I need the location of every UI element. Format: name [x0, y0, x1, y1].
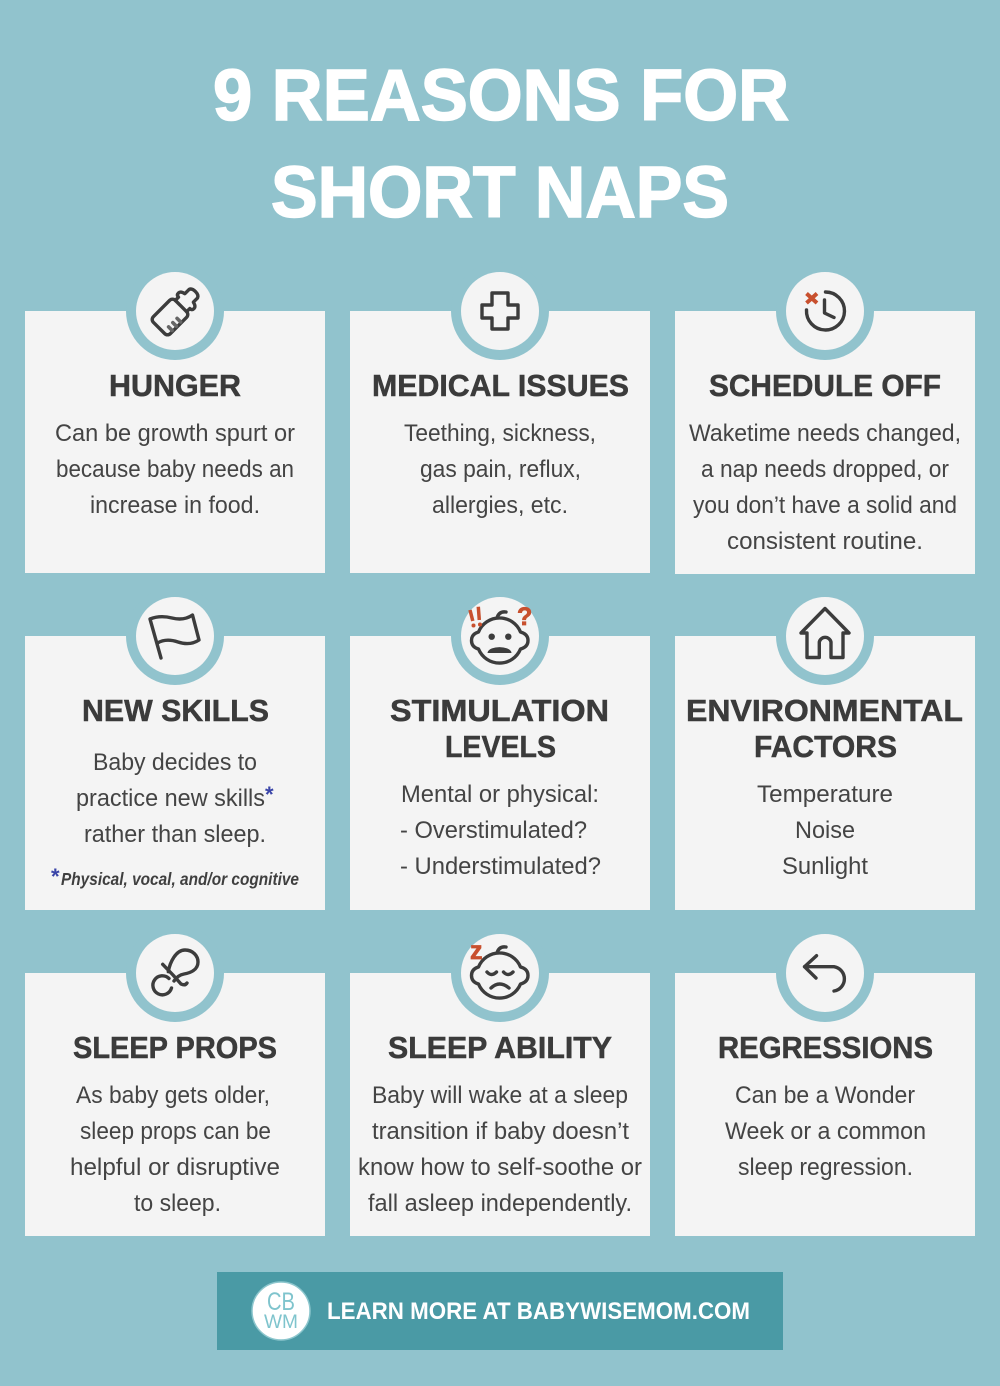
icon: pacifier: [153, 950, 198, 995]
body text: to sleep.: [134, 1190, 221, 1217]
body text: sleep props can be: [80, 1118, 271, 1145]
logo: WM: [264, 1312, 298, 1333]
body text: Baby decides to: [93, 749, 257, 776]
body text: - Overstimulated?: [400, 817, 587, 844]
banner: [217, 1272, 783, 1350]
panel: hunger: [25, 262, 325, 573]
panel: schedule off: [675, 262, 975, 574]
icon: worried baby face: ?: [517, 603, 532, 631]
body text: transition if baby doesn’t: [372, 1118, 629, 1145]
body text: increase in food.: [90, 492, 260, 519]
body text: [400, 781, 601, 880]
footnote: [51, 864, 299, 889]
panel: stimulation levels: [350, 587, 650, 910]
body text: *: [265, 782, 274, 807]
panel: regressions: [675, 924, 975, 1236]
heading: SCHEDULE OFF: [709, 368, 941, 403]
heading: REGRESSIONS: [718, 1030, 933, 1065]
body text: Waketime needs changed,: [689, 420, 961, 447]
body text: [358, 1082, 642, 1217]
body text: [689, 420, 961, 555]
heading: ENVIRONMENTAL: [686, 693, 963, 728]
body text: Sunlight: [782, 853, 868, 880]
body text: you don’t have a solid and: [693, 492, 957, 519]
body text: allergies, etc.: [432, 492, 568, 519]
title: 9 REASONS FOR: [213, 56, 789, 136]
panel: medical issues: [350, 262, 650, 573]
heading: SLEEP ABILITY: [388, 1030, 612, 1065]
heading: SLEEP PROPS: [73, 1030, 277, 1065]
body text: Can be growth spurt or: [55, 420, 295, 447]
body text: [404, 420, 596, 519]
body text: [55, 420, 295, 519]
icon: house: [801, 608, 849, 658]
body text: Noise: [795, 817, 855, 844]
title: [213, 56, 789, 233]
heading: FACTORS: [754, 729, 897, 764]
body text: Mental or physical:: [401, 781, 599, 808]
icon: baby bottle: [151, 283, 204, 336]
body text: rather than sleep.: [84, 821, 266, 848]
call to action: LEARN MORE AT BABYWISEMOM.COM: [327, 1298, 750, 1325]
icon: clock with red x: [806, 292, 844, 330]
body text: - Understimulated?: [400, 853, 601, 880]
body text: As baby gets older,: [76, 1082, 270, 1109]
body text: [725, 1082, 926, 1181]
body text: a nap needs dropped, or: [701, 456, 949, 483]
body text: Teething, sickness,: [404, 420, 596, 447]
body text: Baby will wake at a sleep: [372, 1082, 628, 1109]
body text: practice new skills: [76, 785, 265, 812]
icon: sleeping baby face: [470, 937, 528, 998]
title: SHORT NAPS: [271, 153, 729, 233]
footnote: *: [51, 864, 60, 889]
heading: HUNGER: [109, 368, 241, 403]
icon: worried baby face: [470, 603, 532, 663]
panel: sleep ability: [350, 924, 650, 1236]
icon: back arrow: [804, 956, 844, 991]
heading: [390, 693, 609, 764]
body text: gas pain, reflux,: [420, 456, 581, 483]
body text: helpful or disruptive: [70, 1154, 280, 1181]
panel: environmental factors: [675, 587, 975, 910]
body text: [70, 1082, 280, 1217]
heading: NEW SKILLS: [82, 693, 269, 728]
body text: fall asleep independently.: [368, 1190, 632, 1217]
body text: [76, 749, 274, 848]
body text: because baby needs an: [56, 456, 294, 483]
icon: flag: [150, 615, 199, 658]
panel: sleep props: [25, 924, 325, 1236]
logo: CB: [267, 1288, 295, 1316]
heading: [686, 693, 963, 764]
panel: new skills: [25, 587, 325, 910]
icon: sleeping baby face: z: [470, 937, 482, 965]
body text: consistent routine.: [727, 528, 923, 555]
heading: STIMULATION: [390, 693, 609, 728]
body text: Temperature: [757, 781, 893, 808]
logo: [252, 1282, 310, 1340]
body text: know how to self-soothe or: [358, 1154, 642, 1181]
body text: Week or a common: [725, 1118, 926, 1145]
body text: [757, 781, 893, 880]
body text: Can be a Wonder: [735, 1082, 915, 1109]
body text: sleep regression.: [738, 1154, 913, 1181]
icon: medical cross: [482, 293, 518, 329]
heading: LEVELS: [445, 729, 556, 764]
footnote: Physical, vocal, and/or cognitive: [61, 869, 299, 889]
heading: MEDICAL ISSUES: [372, 368, 629, 403]
